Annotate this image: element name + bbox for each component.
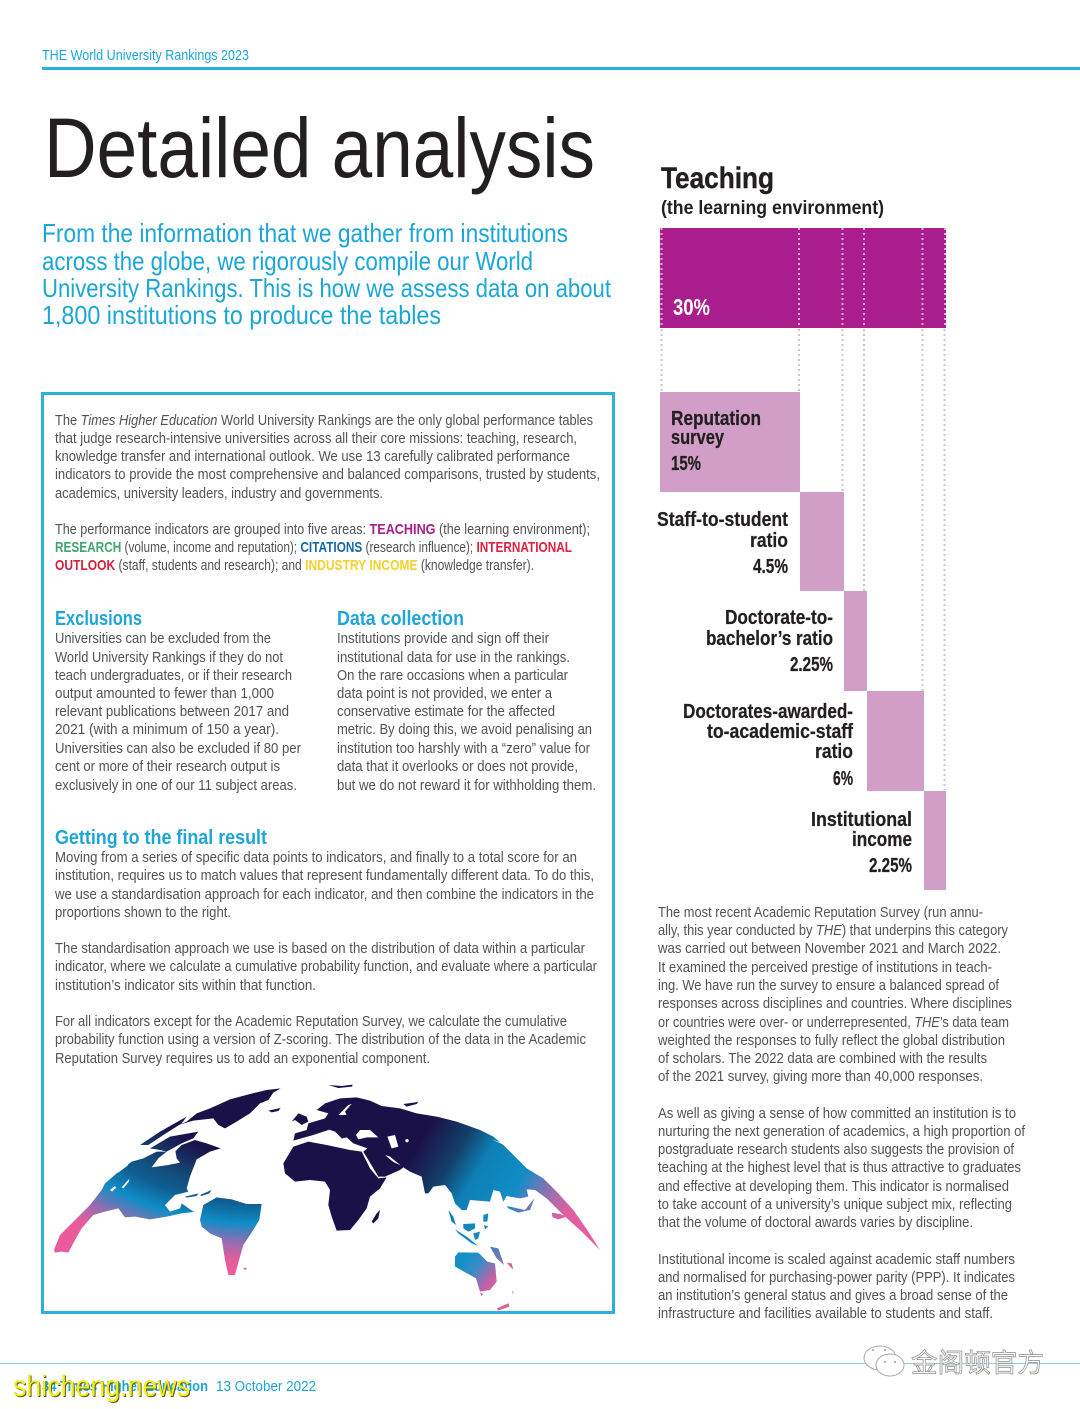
bar: staff-to-student ratio 4.5% (657, 492, 844, 591)
title: Detailed analysis (44, 101, 595, 195)
text: exclusions (55, 630, 301, 794)
text: final result: For all indicators except for the Academic Reputation Survey, we calculate the cumulative (55, 1013, 567, 1030)
text: institutional income explanation: and normalised for purchasing-power parity (PPP). It indicates (658, 1269, 1015, 1286)
intro paragraph: The Times Higher Education World University Rankings are the only global performance tables (55, 412, 593, 429)
text: reputation survey explanation: weighted the responses to fully reflect the global distribution (657, 1032, 1005, 1049)
text: doctoral indicators explanation: nurturing the next generation of academics, a high proportion of (658, 1123, 1026, 1140)
map: Australia and New Zealand (455, 1252, 514, 1311)
bar: doctorate-to-bachelor's ratio 2.25%: 2.25% (790, 654, 833, 676)
text: data collection: data point is not provided, we enter a (337, 685, 553, 702)
bar: reputation survey 15%: Reputation (671, 408, 761, 430)
watermark: wechat icon and label (864, 1346, 1044, 1378)
bar: doctorates-awarded ratio 6% (683, 691, 924, 791)
bar: staff-to-student ratio 4.5%: Staff-to-student (657, 509, 788, 531)
footer: 34 Times Higher Education (42, 1378, 208, 1395)
intro paragraph: knowledge transfer and international outlook. We use 13 carefully calibrated performance (55, 448, 570, 465)
text: doctoral indicators explanation: that the volume of doctoral awards varies by discipline. (658, 1214, 973, 1231)
text: data collection: Institutions provide and sign off their (337, 630, 549, 647)
bar: institutional income 2.25% (811, 791, 946, 890)
subtitle: 1,800 institutions to produce the tables (42, 300, 441, 330)
text: doctoral indicators explanation: postgraduate research students also suggests the provision of (658, 1141, 1015, 1158)
text: final result: Reputation Survey requires us to add an exponential component. (55, 1050, 430, 1067)
bar: staff-to-student ratio 4.5%: 4.5% (753, 556, 788, 578)
text: exclusions: teach undergraduates, or if their research (55, 667, 292, 684)
text: data collection: metric. By doing this, we avoid penalising an (337, 721, 592, 738)
text: institutional income explanation (658, 1251, 1015, 1322)
text: exclusions: 2021 (with a minimum of 150 a year). (55, 721, 279, 738)
intro paragraph: academics, university leaders, industry and governments. (55, 485, 383, 502)
map: Indonesia, Japan, Pacific islands (448, 1198, 567, 1311)
five areas paragraph (55, 521, 590, 574)
watermark: wechat icon and label: 金阁顿官方 (911, 1348, 1044, 1378)
text: exclusions: exclusively in one of our 11 subject areas. (55, 777, 297, 794)
text: reputation survey explanation: It examined the perceived prestige of institutions in teach- (658, 959, 992, 976)
text: exclusions: relevant publications between 2017 and (55, 703, 289, 720)
world map (54, 1085, 600, 1311)
heading: exclusions: Exclusions (55, 608, 142, 630)
heading: teaching: Teaching (661, 162, 774, 195)
subtitle (42, 218, 612, 330)
text: data collection: data that it overlooks or does not provide, (337, 758, 578, 775)
text: doctoral indicators explanation: teaching at the highest level that is thus attractive to graduates (658, 1159, 1021, 1176)
bar: doctorate-to-bachelor's ratio 2.25% (706, 591, 867, 691)
bar: doctorate-to-bachelor's ratio 2.25%: Doctorate-to- (725, 607, 833, 629)
subtitle: across the globe, we rigorously compile our World (42, 246, 533, 276)
text: institutional income explanation: an institution’s general status and gives a broad sense of the (658, 1287, 1008, 1304)
text: institutional income explanation: Institutional income is scaled against academic staff numbers (658, 1251, 1015, 1268)
footer: 13 October 2022 (216, 1378, 316, 1395)
total bar: 30%: 30% (673, 294, 710, 320)
intro paragraph (55, 412, 600, 502)
bar: institutional income 2.25%: 2.25% (869, 855, 912, 877)
text: final result: we use a standardisation approach for each indicator, and then combine the indicators in the (54, 886, 594, 903)
map: Americas and Greenland (54, 1088, 281, 1275)
text: exclusions: cent or more of their research output is (55, 758, 280, 775)
text: reputation survey explanation: ally, this year conducted by THE) that underpins this category (658, 922, 1008, 939)
total bar: 30% (660, 228, 946, 328)
text: final result: Moving from a series of specific data points to indicators, and finally to a total score for an (55, 849, 577, 866)
bar: doctorates-awarded ratio 6%: to-academic-staff (707, 721, 853, 743)
text: exclusions: World University Rankings if they do not (55, 649, 284, 666)
text: final result: The standardisation approach we use is based on the distribution of data within a particular (55, 940, 585, 957)
text: reputation survey explanation: was carried out between November 2021 and March 2022. (657, 940, 1001, 957)
text: doctoral indicators explanation: As well as giving a sense of how committed an institution is to (658, 1105, 1016, 1122)
text: reputation survey explanation: The most recent Academic Reputation Survey (run annu- (658, 904, 983, 921)
subtitle: University Rankings. This is how we assess data on about (42, 273, 612, 303)
bar: reputation survey 15% (660, 392, 800, 492)
bar: reputation survey 15%: 15% (671, 453, 701, 475)
text: final result: proportions shown to the right. (55, 904, 231, 921)
text: reputation survey explanation: of scholars. The 2022 data are combined with the results (658, 1050, 987, 1067)
text: data collection (337, 630, 596, 794)
heading: getting to the final result: Getting to the final result (55, 827, 267, 849)
bar: institutional income 2.25%: income (852, 829, 912, 851)
text: reputation survey explanation (657, 904, 1012, 1085)
text: data collection: conservative estimate for the affected (337, 703, 555, 720)
heading: teaching: (the learning environment) (661, 198, 884, 219)
five areas paragraph: The performance indicators are grouped into five areas: TEACHING (the learning environment); (55, 521, 590, 538)
text: doctoral indicators explanation (658, 1105, 1026, 1231)
bar: institutional income 2.25%: Institutional (811, 809, 912, 831)
text: final result (54, 849, 597, 1067)
five areas paragraph: OUTLOOK (staff, students and research); and INDUSTRY INCOME (knowledge transfer). (55, 557, 534, 574)
bar: reputation survey 15%: survey (671, 427, 725, 449)
heading: teaching (661, 162, 884, 219)
text: reputation survey explanation: responses across disciplines and countries. Where disciplines (658, 995, 1012, 1012)
text: reputation survey explanation: of the 2021 survey, giving more than 40,000 responses. (658, 1068, 983, 1085)
text: data collection: institution too harshly with a “zero” value for (337, 740, 590, 757)
text: final result: probability function using a version of Z-scoring. The distribution of the data in the Academic (55, 1031, 586, 1048)
chart: teaching weighting cascade (657, 228, 946, 890)
watermark: shicheng.news: shicheng.news (13, 1370, 190, 1403)
text: reputation survey explanation: or countries were over- or underrepresented, THE’s data team (658, 1014, 1009, 1031)
text: final result: institution, requires us to match values that represent fundamentally different data. To do this, (55, 867, 594, 884)
text: doctoral indicators explanation: to take account of a university’s unique subject mix, reflecting (658, 1196, 1012, 1213)
running header: THE World University Rankings 2023 (42, 47, 249, 64)
bar: doctorate-to-bachelor's ratio 2.25%: bachelor’s ratio (706, 628, 833, 650)
text: data collection: On the rare occasions when a particular (337, 667, 568, 684)
map: Europe, Africa and Asia (283, 1085, 600, 1250)
watermark: shicheng.news: shicheng.news (14, 1371, 191, 1404)
bar: doctorates-awarded ratio 6%: Doctorates-awarded- (683, 701, 853, 723)
bar: doctorates-awarded ratio 6%: ratio (815, 741, 853, 763)
text: final result: institution’s indicator sits within that function. (55, 977, 316, 994)
heading: data collection: Data collection (337, 608, 464, 630)
text: final result: indicator, where we calculate a cumulative probability function, and evaluate where a particular (55, 958, 597, 975)
running header (42, 47, 1080, 70)
text: exclusions: Universities can also be excluded if 80 per (55, 740, 301, 757)
five areas paragraph: RESEARCH (volume, income and reputation); CITATIONS (research influence); INTERNATIONAL (55, 539, 572, 556)
intro paragraph: that judge research-intensive universities across all their core missions: teaching, research, (55, 430, 577, 447)
text: institutional income explanation: infrastructure and facilities available to students and staff. (658, 1305, 993, 1322)
text: exclusions: Universities can be excluded from the (55, 630, 271, 647)
text: reputation survey explanation: ing. We have run the survey to ensure a balanced spread of (658, 977, 1000, 994)
bar: staff-to-student ratio 4.5%: ratio (750, 530, 788, 552)
text: doctoral indicators explanation: and effective at developing them. This indicator is normalised (658, 1178, 1009, 1195)
text: data collection: institutional data for use in the rankings. (337, 649, 570, 666)
text: exclusions: output amounted to fewer than 1,000 (55, 685, 274, 702)
bar: doctorates-awarded ratio 6%: 6% (833, 768, 853, 790)
footer (0, 1363, 1080, 1395)
subtitle: From the information that we gather from institutions (42, 218, 568, 248)
panel: methodology box (42, 394, 614, 1312)
text: data collection: but we do not reward it for withholding them. (337, 777, 596, 794)
intro paragraph: indicators to provide the most comprehensive and balanced comparisons, trusted by students, (55, 466, 600, 483)
